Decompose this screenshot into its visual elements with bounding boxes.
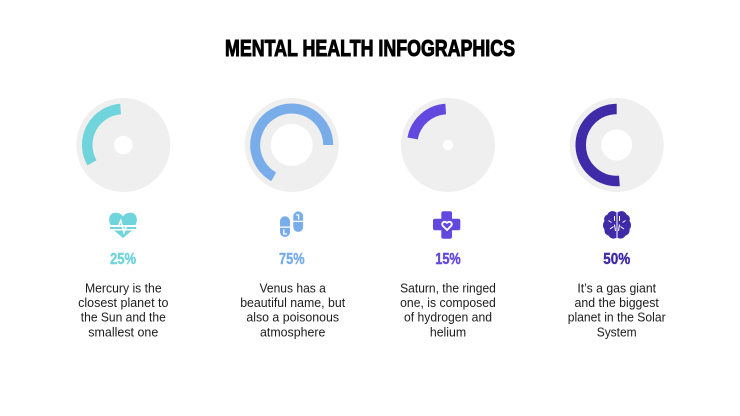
- text block: Jupiter: planet in the Solar: [568, 310, 666, 325]
- text block: Venus: also a poisonous: [246, 310, 339, 325]
- percentage: 50%: 50%: [603, 251, 630, 268]
- text block: Jupiter: and the biggest: [575, 295, 659, 310]
- percentage: 15%: 15%: [435, 251, 461, 268]
- panel: Saturn 15%: [400, 98, 496, 339]
- text block: Saturn: of hydrogen and: [404, 310, 492, 325]
- percentage: 25%: 25%: [110, 251, 136, 268]
- text block: Saturn: helium: [430, 324, 466, 339]
- panel: Venus 75%: [240, 98, 345, 339]
- text block: Mercury: Mercury is the: [85, 280, 162, 295]
- text block: Saturn: [400, 280, 496, 339]
- title: MENTAL HEALTH INFOGRAPHICS: [225, 35, 515, 61]
- text block: Venus: atmosphere: [260, 324, 325, 339]
- donut chart: 25%: [76, 98, 170, 192]
- text block: Saturn: Saturn, the ringed: [400, 280, 496, 295]
- text block: Venus: beautiful name, but: [240, 295, 345, 310]
- panel: Mercury 25%: [76, 98, 170, 339]
- text block: Venus: Venus has a: [260, 280, 326, 295]
- text block: Mercury: smallest one: [88, 324, 158, 339]
- panel: Jupiter 50%: [568, 98, 666, 339]
- donut chart: 50%: [570, 98, 664, 192]
- text block: Mercury: the Sun and the: [81, 310, 166, 325]
- text block: Saturn: one, is composed: [400, 295, 496, 310]
- icon: brain: [603, 211, 631, 239]
- text block: Jupiter: System: [597, 324, 637, 339]
- icon: pills: [280, 211, 303, 237]
- icon: medical cross with heart: [433, 211, 460, 239]
- percentage: 75%: 75%: [279, 251, 305, 268]
- text block: Venus: [240, 280, 345, 339]
- text block: Mercury: closest planet to: [78, 295, 168, 310]
- donut chart: 75%: [245, 98, 339, 192]
- text block: Mercury: [78, 280, 168, 339]
- text block: Jupiter: [568, 280, 666, 339]
- icon: heart with pulse: [108, 213, 138, 238]
- text block: Jupiter: It’s a gas giant: [577, 280, 656, 295]
- donut chart: 15%: [401, 98, 495, 192]
